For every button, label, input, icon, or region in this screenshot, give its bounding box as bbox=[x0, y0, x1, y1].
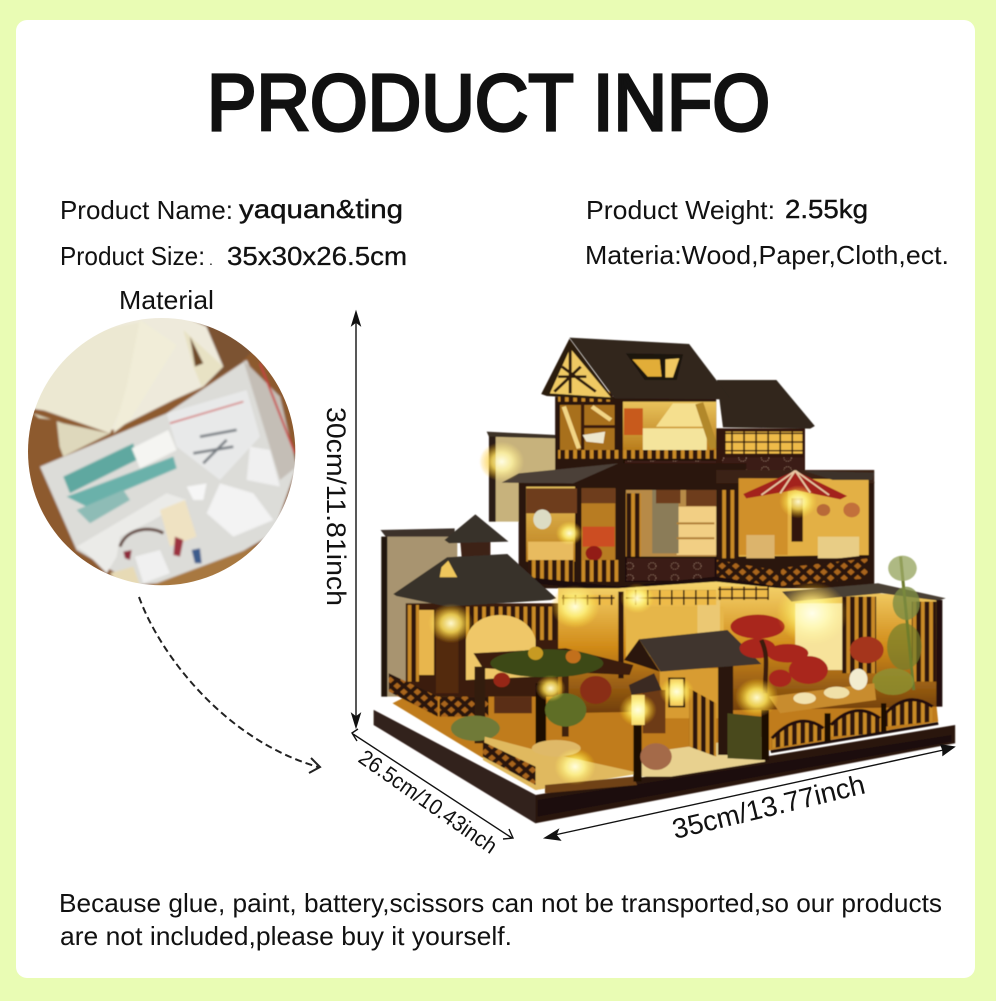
product specs text block bbox=[60, 194, 949, 271]
red blossom tree bbox=[730, 615, 884, 693]
product specs text block: 2.55kg bbox=[785, 194, 868, 224]
height label: 30cm/11.81inch bbox=[321, 407, 351, 606]
note text block: are not included,please buy it yourself. bbox=[60, 921, 512, 951]
height dimension arrow bbox=[352, 312, 360, 727]
product specs text block: Product Name: bbox=[60, 195, 233, 225]
upper floor bbox=[555, 392, 805, 474]
material label: Material bbox=[119, 285, 214, 315]
product specs text block: yaquan&ting bbox=[239, 194, 403, 224]
bamboo plant bbox=[872, 556, 922, 695]
second floor bbox=[517, 463, 874, 592]
left pavilion bbox=[389, 514, 558, 717]
title: PRODUCT INFO bbox=[207, 58, 770, 147]
dashed arrow from material to house bbox=[139, 597, 320, 773]
light glows bbox=[428, 442, 848, 785]
product specs text block: 35x30x26.5cm bbox=[227, 241, 407, 271]
entrance gate with roof bbox=[624, 630, 769, 782]
width dimension arrow bbox=[545, 745, 954, 840]
product specs text block: . bbox=[209, 252, 213, 268]
bench and cushions bbox=[769, 669, 876, 713]
house base bbox=[374, 620, 955, 823]
courtyard floor bbox=[483, 737, 765, 793]
width label: 35cm/13.77inch bbox=[669, 769, 868, 845]
front fence bbox=[771, 700, 938, 752]
note text block bbox=[59, 888, 942, 951]
product specs text block: Product Size: bbox=[60, 241, 205, 271]
product specs text block: Materia:Wood,Paper,Cloth,ect. bbox=[585, 240, 949, 270]
rear walls bbox=[381, 432, 559, 697]
upper roofs bbox=[541, 338, 815, 429]
ground floor bbox=[558, 582, 946, 713]
dollhouse model bbox=[374, 338, 955, 823]
pergola with flowers bbox=[451, 647, 633, 787]
note text block: Because glue, paint, battery,scissors can not be transported,so our products bbox=[59, 888, 942, 918]
depth label: 26.5cm/10.43inch bbox=[354, 745, 502, 859]
material photo circle bbox=[28, 318, 296, 586]
product specs text block: Product Weight: bbox=[586, 195, 775, 225]
second floor awning bbox=[502, 463, 618, 483]
depth dimension arrow bbox=[352, 729, 513, 839]
